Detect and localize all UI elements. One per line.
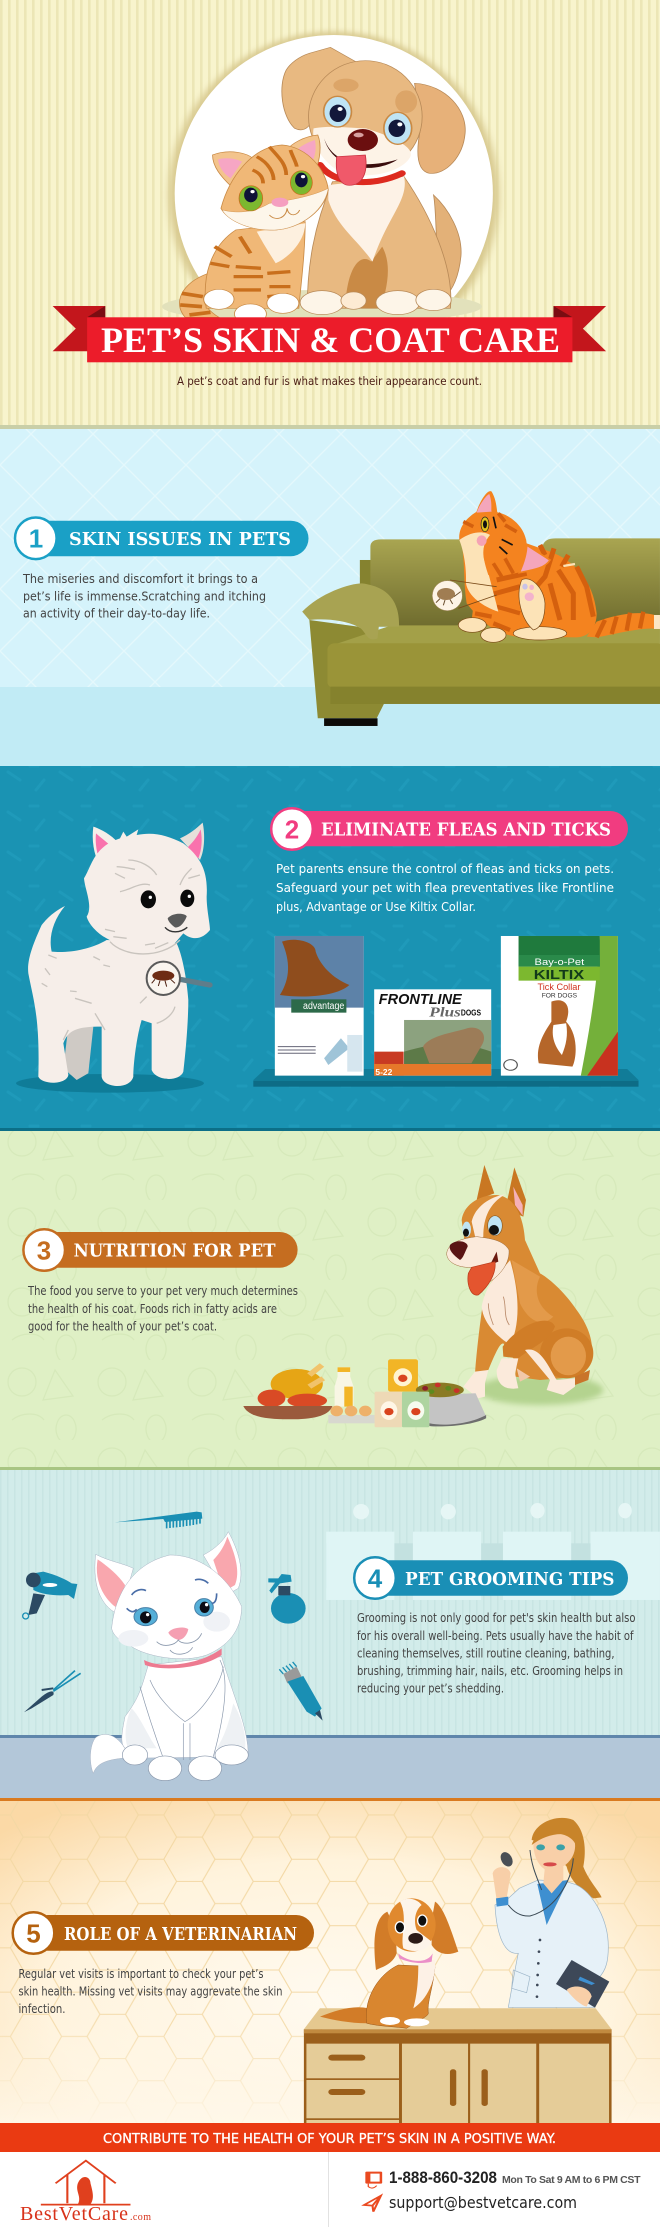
heading pill: 4: PET GROOMING TIPS <box>405 1569 614 1590</box>
heading pill: 4: 4 <box>368 1564 383 1594</box>
panel: nutrition <box>0 1131 660 1470</box>
logo: BestVetCare <box>20 2203 128 2225</box>
icon: spray bottle <box>268 1574 306 1624</box>
subtitle: A pet’s coat and fur is what makes their appearance count. <box>177 374 482 388</box>
wall panels <box>326 1503 660 1600</box>
illustration: puppy <box>282 47 465 315</box>
text block: veterinarian: skin health. Missing vet visits may aggrevate the skin <box>18 1984 282 1998</box>
heading pill: 5 <box>13 1912 314 1954</box>
illustration: kitten <box>179 135 328 324</box>
text block: fleas and ticks: Safeguard your pet with flea preventatives like Frontline <box>276 881 614 895</box>
illustration: vet <box>493 1818 609 2008</box>
illustration: exam table <box>304 2008 612 2123</box>
product: advantage: advantage <box>303 1001 344 1012</box>
icon: comb <box>115 1512 202 1528</box>
text block: fleas and ticks: plus, Advantage or Use Kiltix Collar. <box>276 900 476 914</box>
illustration: scratching cat <box>432 491 660 642</box>
heading pill: 1: 1 <box>29 524 43 554</box>
heading pill: 4 <box>354 1557 628 1599</box>
hours: Mon To Sat 9 AM to 6 PM CST <box>502 2174 641 2186</box>
call-to-action bar <box>0 2123 660 2152</box>
title ribbon <box>53 306 606 362</box>
text block: grooming <box>357 1611 636 1696</box>
icon: hair dryer <box>23 1572 77 1619</box>
product: advantage <box>275 936 364 1076</box>
text block: nutrition: good for the health of your pet’s coat. <box>28 1320 217 1334</box>
product: frontline <box>374 989 491 1077</box>
text block: veterinarian: infection. <box>18 2002 66 2016</box>
product: frontline: FRONTLINE <box>379 991 462 1007</box>
text block: fleas and ticks <box>276 862 614 914</box>
text block: nutrition: The food you serve to your pet very much determines <box>27 1284 298 1298</box>
illustration: white dog with magnifier <box>16 823 210 1093</box>
icon: phone <box>365 2172 382 2188</box>
text block: skin issues: The miseries and discomfort it brings to a <box>22 572 258 586</box>
heading pill: 5: ROLE OF A VETERINARIAN <box>64 1924 297 1945</box>
shelf <box>253 1069 639 1087</box>
icon: paper plane <box>364 2196 381 2212</box>
text block: veterinarian <box>18 1967 282 2016</box>
panel: veterinarian <box>0 1798 660 2123</box>
product: kiltix <box>501 936 618 1076</box>
text block: grooming: reducing your pet’s shedding. <box>357 1682 504 1696</box>
text block: nutrition: the health of his coat. Foods rich in fatty acids are <box>28 1302 277 1316</box>
heading pill: 3: 3 <box>37 1236 51 1266</box>
illustration: brown dog <box>447 1165 603 1405</box>
call-to-action bar: CONTRIBUTE TO THE HEALTH OF YOUR PET’S SKIN IN A POSITIVE WAY. <box>103 2132 556 2147</box>
email: support@bestvetcare.com <box>389 2193 577 2212</box>
panel: footer <box>0 2152 660 2227</box>
heading pill: 2: 2 <box>285 814 299 844</box>
product: kiltix: KILTIX <box>534 968 585 982</box>
panel: fleas and ticks <box>0 766 660 1131</box>
heading pill: 5: 5 <box>26 1918 41 1948</box>
product: kiltix: Tick Collar <box>537 982 581 993</box>
text block: skin issues <box>22 572 266 620</box>
icon: flea callout <box>432 581 462 611</box>
heading pill: 3 <box>23 1229 298 1271</box>
illustration: white cat <box>90 1532 248 1781</box>
icon: curling iron <box>24 1671 81 1712</box>
panel: grooming <box>0 1470 660 1798</box>
heading pill: 1: SKIN ISSUES IN PETS <box>69 529 291 550</box>
product: kiltix: FOR DOGS <box>542 991 577 999</box>
title: PET’S SKIN & COAT CARE <box>101 320 560 360</box>
illustration: spaniel <box>320 1898 458 2028</box>
product: frontline: 5-22 <box>375 1068 392 1077</box>
text block: fleas and ticks: Pet parents ensure the control of fleas and ticks on pets. <box>276 862 614 876</box>
heading pill: 2: ELIMINATE FLEAS AND TICKS <box>321 820 611 840</box>
logo: .com <box>130 2212 151 2223</box>
panel: header <box>0 0 660 429</box>
text block: skin issues: an activity of their day-to-day life. <box>23 606 210 620</box>
text block: nutrition <box>27 1284 298 1334</box>
text block: veterinarian: Regular vet visits is important to check your pet’s <box>18 1967 264 1981</box>
product: frontline: Plus <box>429 1005 461 1020</box>
panel: skin issues <box>0 429 660 766</box>
heading pill: 2 <box>271 808 628 850</box>
heading pill: 3: NUTRITION FOR PET <box>74 1240 276 1262</box>
product: frontline: DOGS <box>461 1009 481 1017</box>
illustration: food <box>243 1359 486 1427</box>
logo <box>20 2161 151 2225</box>
product: kiltix: Bay-o-Pet <box>535 957 584 968</box>
icon: clipper <box>279 1662 323 1721</box>
text block: skin issues: pet’s life is immense.Scratching and itching <box>23 590 266 604</box>
phone number: 1-888-860-3208 <box>389 2168 497 2187</box>
heading pill: 1 <box>15 518 308 559</box>
illustration: sofa <box>302 538 660 726</box>
